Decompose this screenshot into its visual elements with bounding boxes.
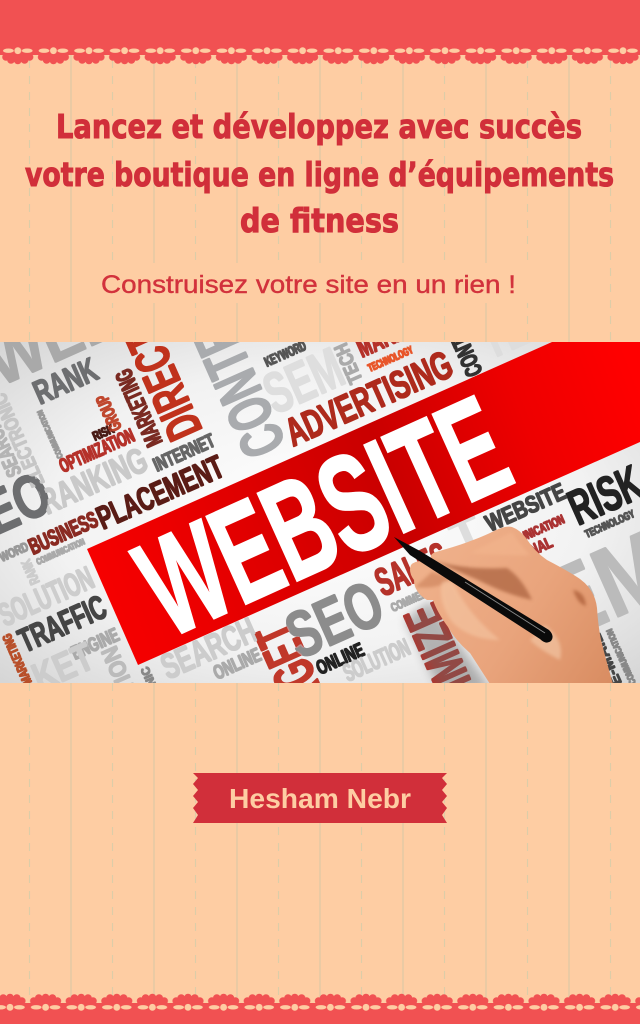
title: de fitness <box>240 201 399 240</box>
subtitle: Construisez votre site en un rien ! <box>101 271 516 299</box>
word cloud: TECHNOLOGY <box>366 344 415 375</box>
author name: Hesham Nebr <box>229 783 411 814</box>
word cloud: E-MAIL <box>588 631 625 688</box>
word cloud: SALES <box>369 535 455 605</box>
word cloud: CONTENT <box>159 266 300 467</box>
word cloud: TE <box>472 300 536 370</box>
hand shadow <box>405 600 490 690</box>
word cloud: RISK <box>90 421 117 444</box>
icon: hand holding pen <box>410 527 613 684</box>
word cloud: RANK <box>28 351 104 412</box>
word cloud: BUSINESS <box>24 506 102 560</box>
word cloud: DIRECT <box>115 320 213 448</box>
word cloud: RANK <box>18 557 43 587</box>
word cloud: MARKETING <box>110 365 168 451</box>
paper background <box>0 342 640 683</box>
word cloud: TARGET <box>243 612 355 757</box>
word cloud: COMMUNICATION <box>604 627 638 686</box>
word cloud: SOLUTION <box>339 633 414 687</box>
word cloud: NAL <box>527 534 556 560</box>
word cloud: GROUP <box>92 392 126 435</box>
word cloud: SEM <box>254 335 353 427</box>
word cloud: KEYWORD <box>262 337 308 370</box>
top scalloped border <box>0 0 640 66</box>
word cloud: ADVERTISING <box>279 343 459 455</box>
word cloud: TECH <box>330 340 368 387</box>
word cloud: COMMUNICATION <box>35 537 86 567</box>
word cloud: MARKETING <box>352 294 456 363</box>
word cloud: COMMUNICATION <box>35 409 65 460</box>
author ribbon <box>193 773 447 823</box>
word cloud: COMMERCE <box>389 582 440 615</box>
word cloud: TION <box>96 642 141 699</box>
word cloud: NIC <box>138 664 159 688</box>
word cloud: RANKING <box>34 439 153 522</box>
word cloud: ONLINE <box>313 639 368 680</box>
word cloud: OPTIMIZATION <box>56 425 138 478</box>
word cloud: SEO <box>275 565 394 673</box>
word cloud: PLACEMENT <box>91 448 229 536</box>
word cloud: CONTENT <box>435 305 488 381</box>
word cloud: TRAFFIC <box>13 588 112 660</box>
word cloud: T <box>444 508 487 555</box>
word cloud <box>0 342 640 683</box>
title <box>25 107 614 240</box>
word cloud: KET <box>26 635 100 700</box>
word cloud: ONLINE <box>210 644 265 685</box>
word cloud: INTERNET <box>150 430 218 477</box>
bottom scalloped border <box>0 992 640 1024</box>
word cloud: TIMIZE <box>393 595 491 719</box>
word cloud: WEBSITE <box>481 478 570 537</box>
red band <box>87 342 640 665</box>
icon: pen <box>394 537 553 643</box>
word cloud: COMMUNICATION <box>492 512 567 556</box>
word cloud: ENGINE <box>68 624 123 665</box>
word cloud: SEARCH <box>155 609 263 687</box>
website word cloud image <box>0 342 640 683</box>
